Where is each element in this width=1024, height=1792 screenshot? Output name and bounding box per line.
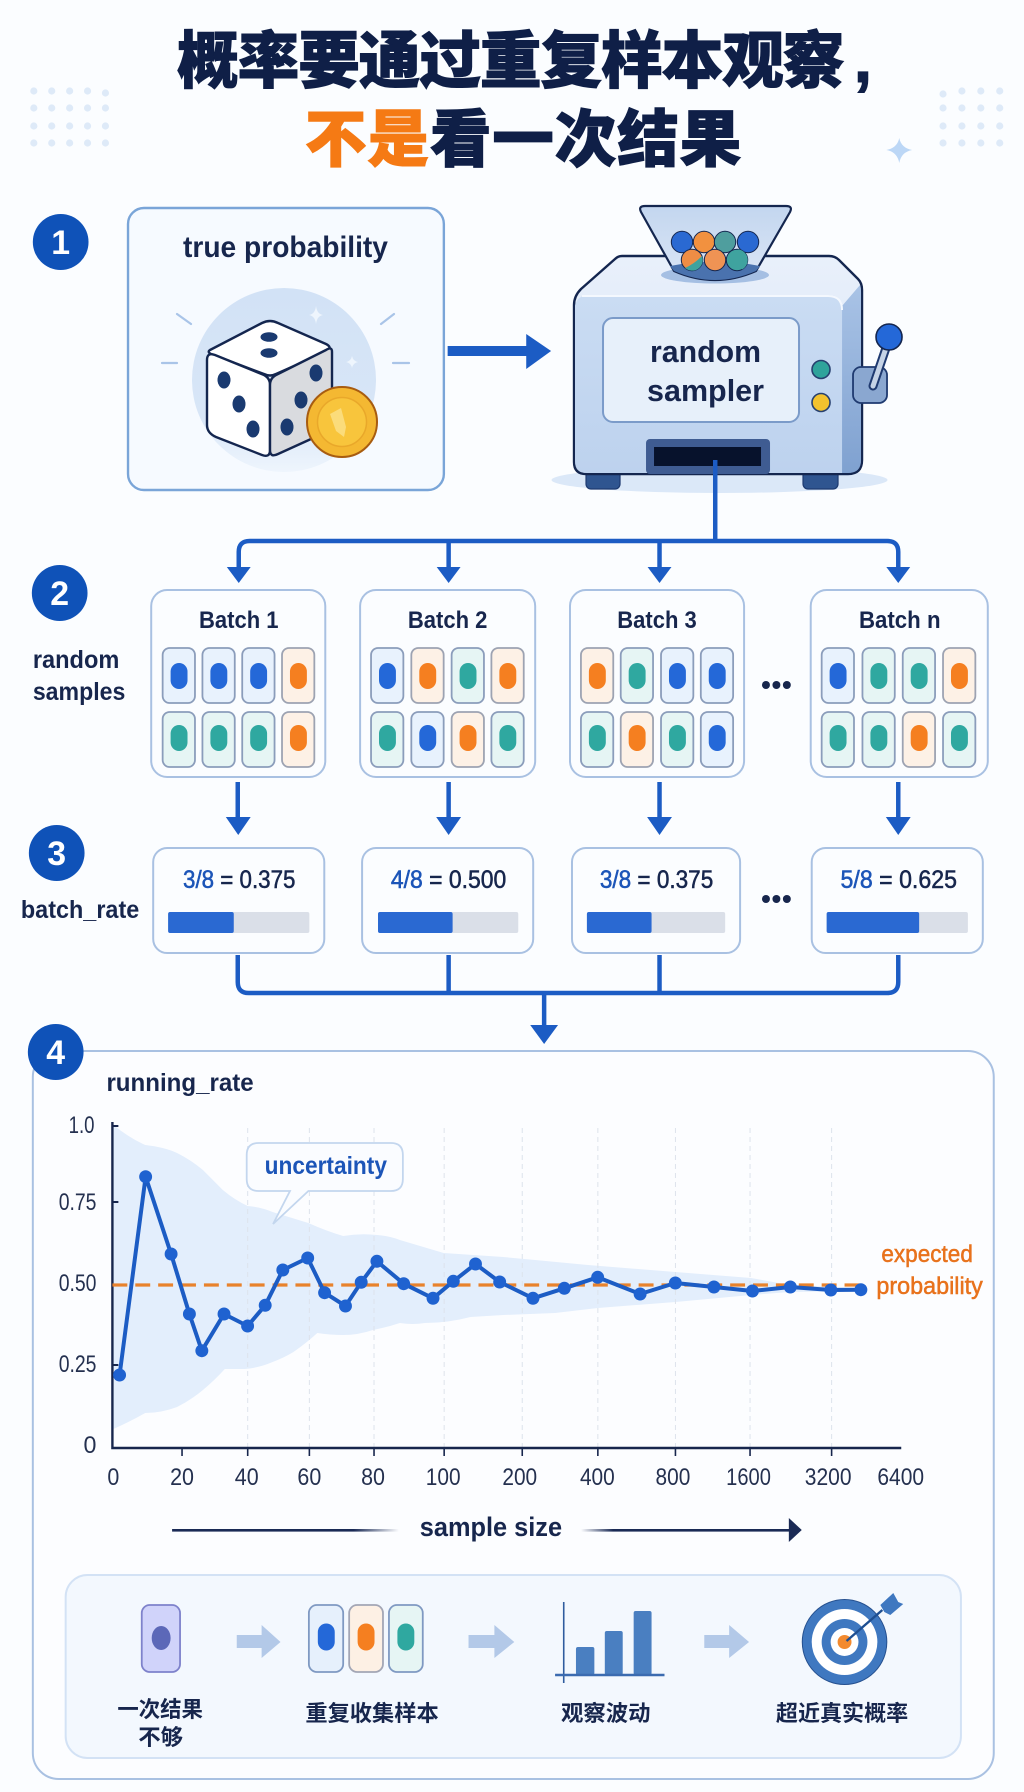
text: one result: 不够 xyxy=(138,1725,183,1750)
machine shadow xyxy=(552,467,888,493)
panel: batch 3: Batch 3 xyxy=(617,607,697,634)
icon: coin xyxy=(307,387,377,457)
x axis labels: 20 xyxy=(170,1464,194,1491)
arrows: sampler to batches xyxy=(227,460,910,583)
panel: rate 3 xyxy=(572,848,740,953)
machine silhouette xyxy=(574,256,862,474)
icon: random sampler machine xyxy=(552,206,902,493)
panel: running rate chart xyxy=(33,1051,994,1779)
ellipsis between rates xyxy=(762,895,791,903)
text: one result xyxy=(117,1697,203,1750)
halo sparkles xyxy=(309,306,358,368)
y axis labels: 0.75 xyxy=(59,1189,96,1216)
output slot xyxy=(646,439,770,474)
decorative dots right xyxy=(939,87,1003,147)
badge 3 xyxy=(29,825,85,881)
ball accents xyxy=(685,249,748,271)
panel: rate n xyxy=(812,848,983,953)
panel: rate 3: 3/8 = 0.375 xyxy=(600,866,713,894)
expected probability line xyxy=(112,1283,867,1287)
heading: true probability: true probability xyxy=(183,231,388,264)
badge 1: 1 xyxy=(51,224,70,262)
text: observe fluctuation: 观察波动 xyxy=(561,1701,651,1726)
front highlight xyxy=(582,296,842,310)
panel: batch n: Batch n xyxy=(859,607,941,634)
icon: sparkle xyxy=(886,138,912,163)
badge 3: 3 xyxy=(47,835,66,873)
panel: rate 1: 3/8 = 0.375 xyxy=(183,866,295,894)
x axis labels: 40 xyxy=(235,1464,259,1491)
machine front xyxy=(575,295,842,473)
y axis labels: 0 xyxy=(84,1432,96,1459)
title: , xyxy=(853,22,872,97)
buttons xyxy=(812,360,830,412)
arrow: step 1 xyxy=(237,1625,281,1658)
machine side xyxy=(842,285,861,473)
y axis labels xyxy=(59,1112,96,1459)
balls xyxy=(671,231,759,271)
text: repeat samples: 重复收集样本 xyxy=(305,1701,439,1726)
dice illustration xyxy=(162,288,409,472)
arrows: batches to rates xyxy=(226,782,911,835)
panel: rate 2: 4/8 = 0.500 xyxy=(391,866,506,894)
panel: true probability xyxy=(128,208,444,490)
hopper xyxy=(640,206,791,280)
rays xyxy=(162,314,409,363)
panel: batch 3 xyxy=(570,590,744,777)
icon: bar chart xyxy=(555,1602,664,1683)
machine label xyxy=(647,334,764,408)
y axis labels: 1.0 xyxy=(69,1112,95,1139)
badge 1 xyxy=(33,214,89,270)
x axis labels: 200 xyxy=(502,1464,537,1491)
icon: target xyxy=(802,1593,903,1684)
decorative dots left xyxy=(30,87,109,147)
uncertainty band xyxy=(113,1125,860,1429)
x axis title: sample size xyxy=(172,1512,802,1542)
label: random samples xyxy=(33,646,125,706)
heading: running_rate: running_rate xyxy=(106,1069,254,1097)
x axis labels: 100 xyxy=(426,1464,461,1491)
label: random samples: samples xyxy=(33,678,125,706)
arrow: step 3 xyxy=(704,1625,749,1658)
badge 4 xyxy=(28,1024,84,1080)
x axis labels: 1600 xyxy=(726,1464,771,1491)
hopper hole xyxy=(661,266,769,284)
callout: uncertainty xyxy=(247,1143,403,1224)
x axis labels: 400 xyxy=(580,1464,615,1491)
panel: rate 1 xyxy=(153,848,324,953)
x axis labels: 60 xyxy=(297,1464,321,1491)
x axis labels: 800 xyxy=(656,1464,690,1491)
panel: batch 1: Batch 1 xyxy=(199,607,279,634)
text: approach true probability: 超近真实概率 xyxy=(776,1701,908,1726)
machine feet xyxy=(586,470,838,489)
badge 2 xyxy=(32,565,88,621)
badge 4: 4 xyxy=(46,1034,65,1072)
label: batch_rate: batch_rate xyxy=(21,896,139,924)
icon: dice xyxy=(207,321,332,456)
callout: uncertainty: uncertainty xyxy=(265,1152,387,1180)
title: 不是看一次结果 xyxy=(305,106,742,175)
arrow: to sampler xyxy=(448,334,551,369)
x axis labels: 3200 xyxy=(805,1464,852,1491)
panel: batch n xyxy=(811,590,988,777)
panel: rate n: 5/8 = 0.625 xyxy=(841,866,957,894)
hopper base shade xyxy=(670,262,760,280)
label: expected probability: probability xyxy=(876,1273,983,1300)
panel: batch 2: Batch 2 xyxy=(408,607,487,634)
running rate line xyxy=(113,1170,867,1382)
arrows: rates merge xyxy=(238,955,898,1044)
axes xyxy=(112,1122,901,1456)
panel: batch 2 xyxy=(360,590,535,777)
icon: one sample xyxy=(142,1605,180,1672)
ellipsis between batches xyxy=(762,681,791,689)
lever xyxy=(853,324,902,403)
title xyxy=(177,22,872,175)
panel: batch 1 xyxy=(151,590,325,777)
arrow: step 2 xyxy=(469,1625,514,1658)
label: expected probability: expected xyxy=(881,1241,973,1268)
title: 概率要通过重复样本观察 xyxy=(177,27,844,97)
label: random samples: random xyxy=(33,646,119,674)
x axis labels: 6400 xyxy=(877,1464,924,1491)
y axis labels: 0.25 xyxy=(59,1351,96,1378)
panel: rate 2 xyxy=(362,848,533,953)
x axis labels xyxy=(107,1464,924,1491)
badge 2: 2 xyxy=(50,575,69,613)
icon: three samples xyxy=(309,1605,423,1672)
machine label: sampler xyxy=(647,373,764,408)
text: one result: 一次结果 xyxy=(117,1697,203,1722)
x axis labels: 80 xyxy=(361,1464,385,1491)
machine label: random xyxy=(650,334,761,369)
panel: summary flow xyxy=(66,1575,961,1758)
y axis labels: 0.50 xyxy=(59,1270,96,1297)
x axis labels: 0 xyxy=(107,1464,119,1491)
label: expected probability xyxy=(876,1241,983,1300)
x axis title: sample size: sample size xyxy=(420,1512,562,1542)
machine screen xyxy=(603,318,799,422)
dice halo xyxy=(192,288,376,472)
grid lines xyxy=(248,1128,832,1448)
